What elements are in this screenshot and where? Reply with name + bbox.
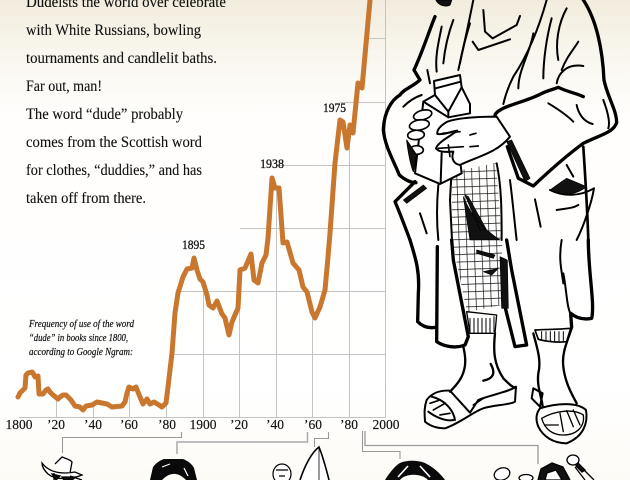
x-axis labels: ’60 bbox=[120, 417, 138, 432]
lower robe, legs and sandals bbox=[410, 240, 593, 443]
peak year labels: 1938 bbox=[260, 157, 284, 171]
x-axis labels: ’60 bbox=[304, 417, 322, 432]
chart caption bbox=[28, 319, 135, 358]
chart caption: “dude” in books since 1800, bbox=[29, 333, 128, 344]
peak year labels: 1975 bbox=[323, 101, 346, 115]
chart caption: Frequency of use of the word bbox=[28, 319, 135, 330]
illustration: robed man holding milk carton bbox=[383, 0, 617, 443]
timeline connector brackets bbox=[62, 431, 538, 464]
x-axis labels bbox=[6, 417, 400, 432]
upper robe and hands bbox=[383, 0, 617, 240]
peak year labels: 1895 bbox=[182, 238, 205, 252]
x-axis labels: ’80 bbox=[340, 417, 358, 432]
portrait: long-haired man bbox=[385, 461, 445, 480]
body text bbox=[26, 0, 226, 207]
body text: comes from the Scottish word bbox=[26, 134, 202, 151]
x-axis labels: ’20 bbox=[47, 417, 65, 432]
portrait: flexing muscleman bbox=[492, 455, 594, 480]
body text: taken off from there. bbox=[26, 190, 146, 207]
hand on carton right bbox=[436, 117, 510, 165]
dark cuff hatching bbox=[507, 140, 530, 182]
left sandal bbox=[425, 387, 516, 428]
body text: with White Russians, bowling bbox=[26, 22, 201, 39]
body text: Far out, man! bbox=[26, 78, 102, 95]
chart caption: according to Google Ngram: bbox=[29, 347, 133, 358]
dark shadow beside shorts bbox=[500, 257, 508, 308]
milk carton bbox=[415, 75, 470, 184]
portrait: cowboy bbox=[42, 457, 82, 480]
head fragment bbox=[436, 0, 452, 6]
x-axis labels: 1800 bbox=[6, 417, 33, 432]
x-axis labels: ’40 bbox=[266, 417, 284, 432]
hand on carton left bbox=[407, 108, 433, 154]
body text: for clothes, “duddies,” and has bbox=[26, 162, 202, 179]
peak year labels bbox=[182, 101, 346, 252]
x-axis labels: ’40 bbox=[84, 417, 102, 432]
chart grid bbox=[19, 0, 386, 418]
x-axis labels: 2000 bbox=[372, 417, 400, 432]
pocket hatching bbox=[550, 178, 587, 194]
body text: tournaments and candlelit baths. bbox=[26, 50, 217, 67]
body text: The word “dude” probably bbox=[26, 106, 183, 123]
x-axis labels: ’80 bbox=[158, 417, 176, 432]
x-axis labels: ’20 bbox=[230, 417, 248, 432]
x-axis labels: 1900 bbox=[190, 417, 217, 432]
plaid shorts bbox=[452, 163, 502, 312]
line chart: frequency of dude bbox=[18, 0, 370, 410]
legs bbox=[450, 312, 577, 407]
right sandal bbox=[532, 388, 587, 443]
portrait: dark-haired man bbox=[150, 459, 197, 480]
portrait: surfer with board bbox=[273, 447, 329, 480]
